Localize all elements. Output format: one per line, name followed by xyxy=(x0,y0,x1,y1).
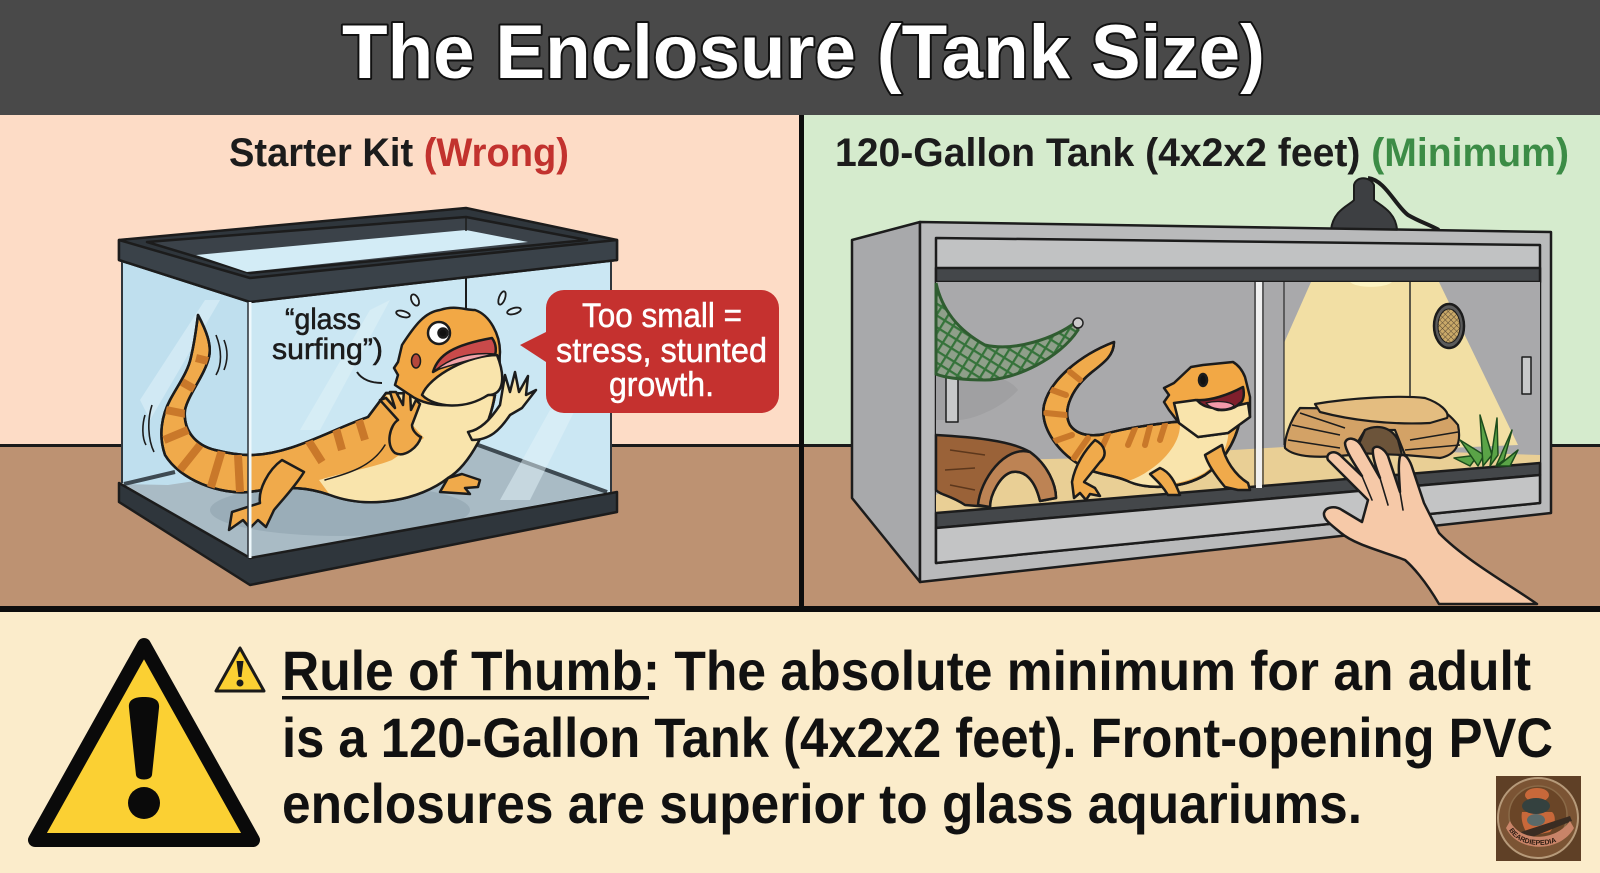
panel dividers xyxy=(0,115,1600,612)
rule text xyxy=(282,639,1553,835)
plant xyxy=(1454,415,1518,466)
rock hide xyxy=(1285,397,1460,458)
panel: 120-gallon tank (minimum) xyxy=(804,115,1600,606)
panel: starter kit (wrong) xyxy=(0,115,800,606)
head xyxy=(394,308,500,405)
enclosure interior xyxy=(936,282,1540,513)
icon: large warning triangle xyxy=(35,645,253,840)
header band xyxy=(0,0,1600,115)
PVC enclosure xyxy=(852,222,1551,582)
heat lamp xyxy=(1331,178,1439,230)
callout: too small: stress, stunted xyxy=(556,332,767,370)
heading: starter kit: Starter Kit (Wrong) xyxy=(229,131,569,175)
log hide xyxy=(936,435,1056,507)
label: glass surfing xyxy=(272,303,383,383)
back leg xyxy=(229,460,304,530)
rear leg xyxy=(1072,440,1105,500)
label: glass surfing: “glass xyxy=(285,303,361,336)
panel: rule of thumb xyxy=(28,638,1581,861)
callout: too small xyxy=(520,290,779,413)
icon: small warning triangle xyxy=(216,648,264,691)
tank rim and base xyxy=(119,208,617,585)
hand xyxy=(1324,439,1537,604)
front legs xyxy=(1150,468,1180,495)
motion marks xyxy=(143,335,227,452)
mesh hammock xyxy=(936,283,1083,380)
logo: beardiepedia badge xyxy=(1496,776,1581,861)
sweat drops xyxy=(395,290,522,319)
happy lizard xyxy=(1043,342,1250,500)
title: The Enclosure (Tank Size) xyxy=(342,10,1265,95)
heading: 120-gallon tank: 120-Gallon Tank (4x2x2 feet) (Minimum) xyxy=(835,131,1569,175)
front frame shading xyxy=(936,475,1540,563)
rule text: enclosures are superior to glass aquariums. xyxy=(282,772,1362,835)
arm right xyxy=(468,372,536,440)
rule text: Rule of Thumb: The absolute minimum for an adult xyxy=(282,639,1531,702)
stressed lizard xyxy=(161,308,536,530)
head xyxy=(1164,362,1250,437)
logo: beardiepedia badge: BEARDIEPEDIA xyxy=(1509,828,1556,845)
bulging eye xyxy=(428,322,450,344)
arm left xyxy=(380,390,421,454)
label: glass surfing: surfing”) xyxy=(272,333,383,366)
callout: too small: Too small = xyxy=(582,297,742,335)
callout: too small: growth. xyxy=(609,366,714,404)
small glass tank xyxy=(122,215,611,558)
